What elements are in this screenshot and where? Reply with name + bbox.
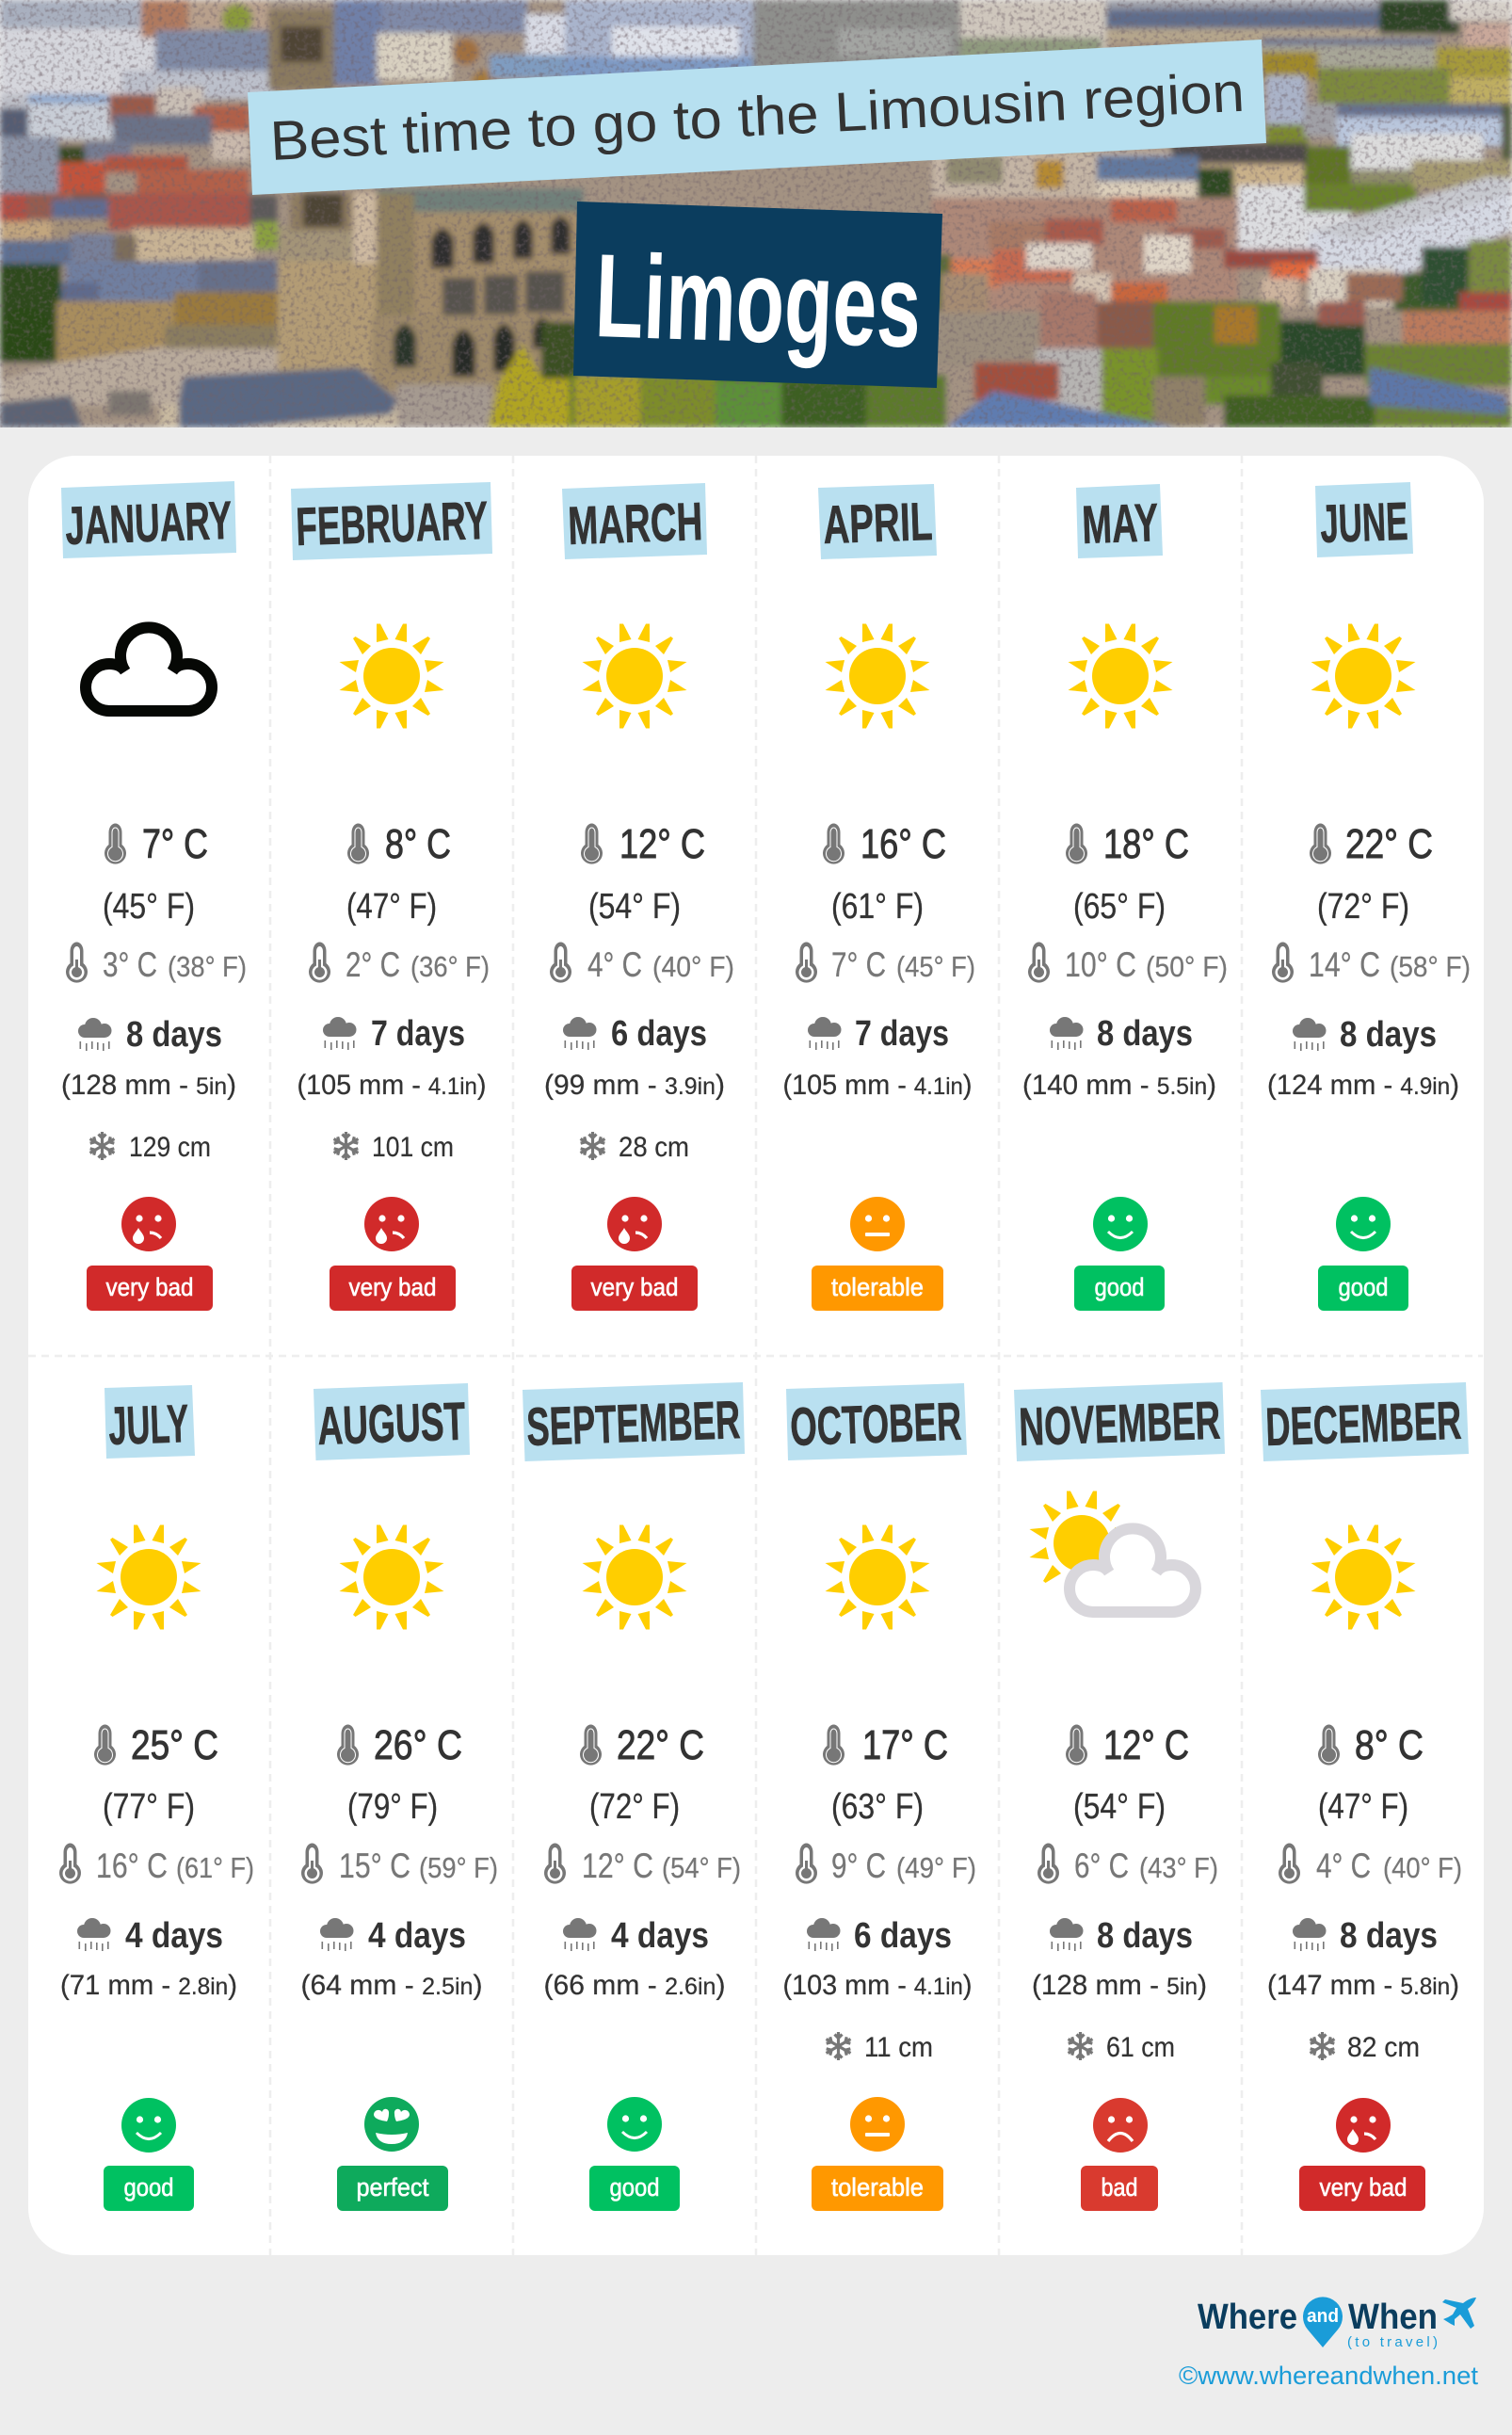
average high temperature: (63° F): [831, 1787, 924, 1827]
panel: January: [61, 481, 247, 1311]
average low temperature: 3° C: [103, 945, 157, 984]
month label: [1315, 482, 1413, 557]
rating: very bad: very bad: [105, 1273, 194, 1301]
rating: tolerable: [812, 2097, 943, 2211]
rainfall: (64 mm - 2.5in): [301, 1970, 482, 2001]
title band: Best time to go to the Limousin region: [268, 61, 1246, 172]
panel: June: [1267, 482, 1471, 1311]
rating: good: [1074, 1197, 1165, 1311]
average high temperature: (61° F): [831, 887, 924, 927]
month label: OCTOBER: [789, 1392, 962, 1458]
rainfall: 8 days: [126, 1015, 222, 1055]
snowfall: [332, 1132, 454, 1163]
footer logo: Where and When (to travel): (to travel): [1347, 2334, 1438, 2350]
month label: JUNE: [1319, 492, 1408, 555]
rating: perfect: [337, 2097, 448, 2211]
average low temperature: (38° F): [168, 950, 247, 983]
rainfall: [60, 1916, 237, 2001]
month label: [523, 1382, 745, 1461]
panel: February: [291, 482, 492, 1311]
average high temperature: [1310, 821, 1433, 927]
average high temperature: (54° F): [1073, 1787, 1166, 1827]
average low temperature: [550, 942, 734, 984]
rating: perfect: perfect: [356, 2173, 429, 2201]
rainfall: [544, 1014, 725, 1101]
panel: November: [1014, 1382, 1225, 2211]
header photo: aerial view of Limoges: [0, 0, 1512, 427]
rainfall: [298, 1014, 486, 1101]
icon: cloud: [86, 627, 212, 711]
average low temperature: (59° F): [419, 1851, 498, 1884]
rating: very bad: [330, 1197, 456, 1311]
snowfall: [1067, 2032, 1175, 2063]
month label: [105, 1385, 195, 1459]
average low temperature: (40° F): [1383, 1851, 1462, 1884]
average high temperature: (47° F): [1318, 1787, 1408, 1827]
average high temperature: 18° C: [1103, 821, 1189, 867]
month label: [786, 1383, 967, 1460]
rainfall: 7 days: [855, 1014, 949, 1054]
rainfall: 8 days: [1097, 1014, 1193, 1054]
average high temperature: 12° C: [1103, 1722, 1189, 1768]
rainfall: (124 mm - 4.9in): [1267, 1070, 1459, 1101]
average high temperature: 22° C: [1345, 821, 1433, 867]
icon: sun: [1068, 623, 1173, 729]
average high temperature: [823, 1722, 948, 1827]
average low temperature: 4° C: [587, 945, 642, 984]
rainfall: (66 mm - 2.6in): [544, 1970, 725, 2001]
rainfall: 8 days: [1340, 1916, 1438, 1956]
title band: [248, 40, 1266, 195]
average high temperature: 22° C: [617, 1722, 704, 1768]
average low temperature: (58° F): [1390, 950, 1471, 983]
average low temperature: [544, 1844, 741, 1885]
icon: sun: [339, 1525, 444, 1629]
snowfall: 61 cm: [1106, 2032, 1175, 2063]
average low temperature: [1037, 1844, 1218, 1885]
average low temperature: (40° F): [652, 950, 734, 983]
average low temperature: (54° F): [662, 1851, 741, 1884]
average low temperature: (43° F): [1139, 1851, 1218, 1884]
footer logo: Where and When (to travel): and: [1307, 2306, 1339, 2327]
website credit: ©www.whereandwhen.net: [1179, 2362, 1478, 2390]
icon: plane: [1442, 2298, 1476, 2329]
average low temperature: 7° C: [831, 945, 886, 984]
average high temperature: [94, 1722, 218, 1827]
rainfall: [1022, 1014, 1216, 1101]
icon: sun behind cloud: [1030, 1492, 1196, 1612]
rating: very bad: [1299, 2098, 1425, 2211]
rainfall: 6 days: [611, 1014, 707, 1054]
rainfall: 4 days: [611, 1916, 709, 1956]
icon: sun: [825, 1525, 930, 1629]
average high temperature: 12° C: [619, 821, 705, 867]
average high temperature: (79° F): [347, 1787, 438, 1827]
average low temperature: (49° F): [896, 1851, 976, 1884]
rating: tolerable: [812, 1197, 943, 1311]
snowfall: 101 cm: [372, 1132, 454, 1163]
panel: May: [1022, 484, 1228, 1311]
average low temperature: [796, 942, 975, 984]
rainfall: (103 mm - 4.1in): [783, 1970, 972, 2001]
average low temperature: [1272, 942, 1471, 984]
rainfall: (105 mm - 4.1in): [783, 1070, 972, 1101]
month label: FEBRUARY: [295, 491, 489, 557]
average low temperature: 2° C: [346, 945, 400, 984]
average high temperature: [1066, 1722, 1189, 1827]
rainfall: [61, 1015, 236, 1101]
rainfall: 4 days: [125, 1916, 223, 1956]
snowfall: [579, 1132, 689, 1163]
month label: [562, 483, 707, 559]
average high temperature: [823, 821, 946, 927]
city name box: Limoges: [593, 229, 924, 372]
month label: NOVEMBER: [1018, 1391, 1221, 1458]
average high temperature: 17° C: [862, 1722, 948, 1768]
rainfall: (105 mm - 4.1in): [298, 1070, 486, 1101]
average low temperature: [1279, 1844, 1462, 1885]
rating: tolerable: tolerable: [831, 2173, 924, 2201]
average high temperature: [103, 821, 208, 927]
rainfall: 6 days: [854, 1916, 952, 1956]
rainfall: [301, 1916, 482, 2001]
rainfall: (71 mm - 2.8in): [60, 1970, 237, 2001]
average high temperature: [1318, 1722, 1424, 1827]
rating: tolerable: tolerable: [831, 1273, 924, 1301]
rating: very bad: [87, 1197, 213, 1311]
rating: good: good: [610, 2173, 659, 2201]
calendar card: [28, 456, 1484, 2255]
month label: [314, 1383, 470, 1460]
rainfall: [783, 1916, 972, 2001]
average low temperature: [796, 1844, 976, 1885]
icon: sun: [1311, 1525, 1416, 1629]
panel: September: [523, 1382, 745, 2211]
rainfall: (140 mm - 5.5in): [1022, 1070, 1216, 1101]
average high temperature: [346, 821, 451, 927]
panel: March: [544, 483, 734, 1311]
snowfall: 82 cm: [1347, 2032, 1420, 2063]
panel: October: [783, 1383, 976, 2211]
average high temperature: 8° C: [1355, 1722, 1424, 1768]
icon: location pin: [1303, 2297, 1343, 2347]
snowfall: 28 cm: [619, 1132, 689, 1163]
month label: APRIL: [822, 492, 933, 556]
average low temperature: 6° C: [1074, 1846, 1129, 1885]
average high temperature: 8° C: [385, 821, 451, 867]
snowfall: 129 cm: [129, 1132, 211, 1163]
average low temperature: 16° C: [96, 1846, 168, 1885]
panel: April: [783, 484, 975, 1311]
average high temperature: [581, 821, 705, 927]
average low temperature: [301, 1844, 498, 1885]
panel: August: [301, 1383, 498, 2211]
rainfall: 8 days: [1340, 1015, 1437, 1055]
average low temperature: 10° C: [1065, 945, 1136, 984]
rainfall: [1267, 1916, 1459, 2001]
average low temperature: 12° C: [582, 1846, 653, 1885]
average low temperature: [1028, 942, 1228, 984]
icon: sun: [825, 623, 930, 729]
month label: AUGUST: [316, 1392, 466, 1457]
month label: [61, 481, 236, 558]
average high temperature: [337, 1722, 462, 1827]
month label: JULY: [107, 1394, 189, 1457]
rating: good: [1318, 1197, 1408, 1311]
icon: sun: [339, 623, 444, 729]
rainfall: (99 mm - 3.9in): [544, 1070, 725, 1101]
rainfall: [1032, 1916, 1207, 2001]
average low temperature: 14° C: [1309, 945, 1380, 984]
average high temperature: (47° F): [346, 887, 437, 927]
average low temperature: (61° F): [176, 1851, 254, 1884]
month label: [1076, 484, 1163, 558]
snowfall: [1309, 2032, 1420, 2063]
rainfall: 8 days: [1097, 1916, 1193, 1956]
icon: sun: [1311, 623, 1416, 729]
average high temperature: 16° C: [861, 821, 946, 867]
average low temperature: [59, 1844, 254, 1885]
city name box: [573, 202, 942, 388]
icon: sun: [96, 1525, 201, 1629]
icon: sun: [582, 623, 687, 729]
rating: good: [104, 2098, 194, 2211]
month label: SEPTEMBER: [525, 1390, 741, 1458]
average high temperature: [580, 1722, 704, 1827]
rating: good: [589, 2097, 680, 2211]
footer logo: Where and When (to travel): [1198, 2297, 1476, 2350]
average high temperature: (77° F): [103, 1787, 195, 1827]
footer logo: Where and When (to travel): When: [1348, 2298, 1438, 2337]
rating: very bad: very bad: [591, 1273, 678, 1301]
panel: July: [59, 1385, 254, 2211]
month label: [818, 484, 937, 559]
month label: MARCH: [567, 492, 703, 556]
footer logo: Where and When (to travel): Where: [1198, 2298, 1297, 2337]
month label: [291, 482, 492, 560]
average low temperature: (45° F): [896, 950, 975, 983]
rainfall: 7 days: [371, 1014, 465, 1054]
average high temperature: 25° C: [131, 1722, 218, 1768]
average low temperature: 9° C: [831, 1846, 886, 1885]
average high temperature: (72° F): [1317, 887, 1409, 927]
rating: very bad: very bad: [1320, 2173, 1407, 2201]
panel: December: [1261, 1382, 1469, 2211]
rainfall: [1267, 1015, 1459, 1101]
average high temperature: (65° F): [1073, 887, 1166, 927]
rating: very bad: very bad: [348, 1273, 437, 1301]
icon: sun: [582, 1525, 687, 1629]
month label: JANUARY: [64, 491, 233, 556]
average low temperature: (36° F): [410, 950, 490, 983]
snowfall: [88, 1132, 211, 1163]
average low temperature: 4° C: [1316, 1846, 1371, 1885]
average low temperature: (50° F): [1146, 950, 1228, 983]
average low temperature: [66, 942, 247, 984]
average high temperature: 26° C: [374, 1722, 462, 1768]
rainfall: (128 mm - 5in): [1032, 1970, 1207, 2001]
average high temperature: [1066, 821, 1189, 927]
rating: good: good: [1094, 1273, 1145, 1301]
month label: [1014, 1382, 1225, 1461]
rating: bad: [1081, 2098, 1158, 2211]
rainfall: [783, 1014, 972, 1101]
month label: MAY: [1081, 492, 1159, 556]
average high temperature: (72° F): [589, 1787, 680, 1827]
rating: good: good: [124, 2173, 173, 2201]
average high temperature: (45° F): [103, 887, 195, 927]
rainfall: 4 days: [368, 1916, 466, 1956]
rainfall: [544, 1916, 725, 2001]
rainfall: (128 mm - 5in): [61, 1070, 236, 1101]
rating: bad: bad: [1102, 2173, 1137, 2201]
average low temperature: [309, 942, 490, 984]
average high temperature: 7° C: [142, 821, 208, 867]
average low temperature: 15° C: [339, 1846, 410, 1885]
average high temperature: (54° F): [588, 887, 681, 927]
rating: good: good: [1339, 1273, 1388, 1301]
rating: very bad: [571, 1197, 698, 1311]
snowfall: 11 cm: [864, 2032, 933, 2063]
rainfall: (147 mm - 5.8in): [1267, 1970, 1459, 2001]
snowfall: [825, 2032, 933, 2063]
